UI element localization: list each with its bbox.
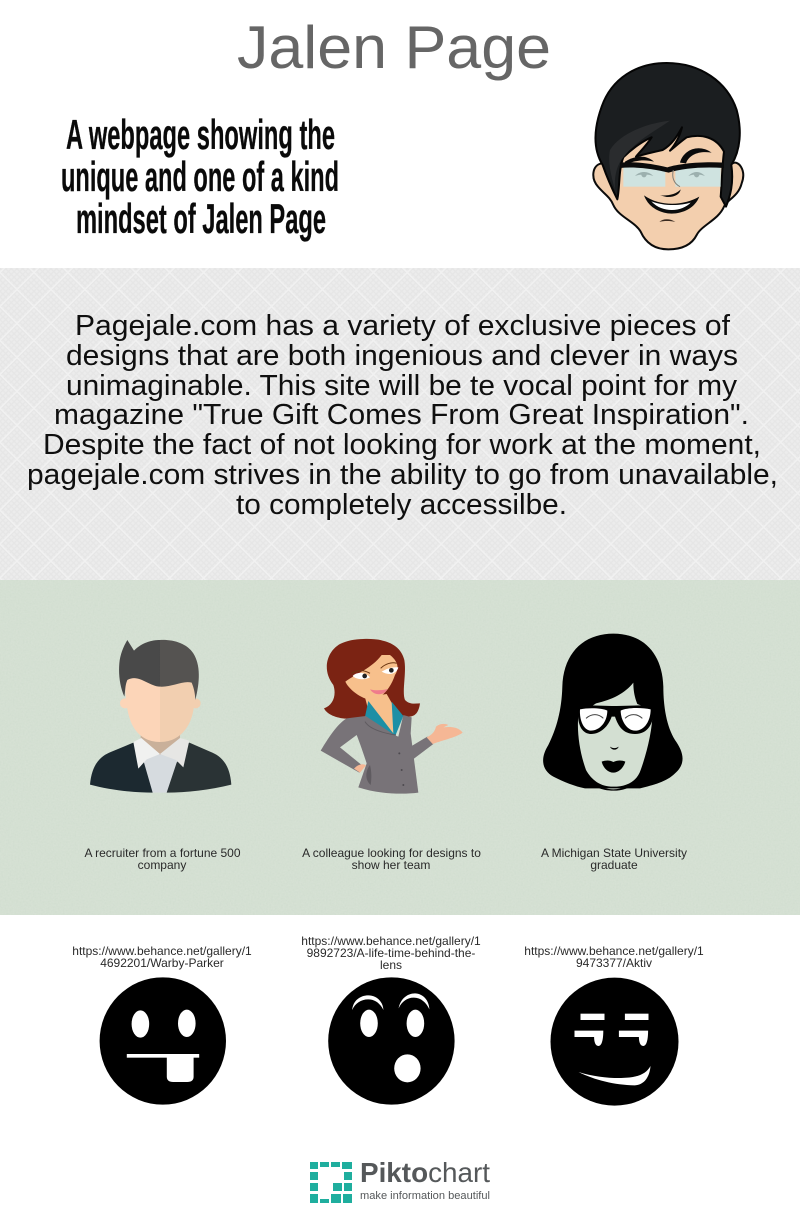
icon: smirking face	[550, 978, 678, 1106]
caption: recruiter	[84, 846, 241, 872]
icon: surprised face	[328, 977, 455, 1105]
subtitle: mindset of Jalen Page	[76, 195, 326, 242]
link: Aktiv	[524, 944, 704, 970]
icon: colleague	[321, 639, 463, 794]
caption: recruiter: A recruiter from a fortune 500	[84, 846, 241, 860]
description text: to completely accessilbe.	[236, 489, 567, 521]
description text: Pagejale.com has a variety of exclusive pieces of	[75, 310, 731, 342]
subtitle: A webpage showing the	[66, 111, 335, 158]
eyebrows	[625, 148, 712, 165]
logo mark	[310, 1162, 352, 1203]
icon: university graduate	[543, 634, 683, 791]
icon: recruiter	[90, 640, 231, 793]
nose	[660, 189, 681, 197]
title: Jalen Page	[237, 14, 551, 81]
wordmark: Piktochart	[360, 1157, 490, 1188]
icon: tongue-out face	[100, 977, 226, 1105]
chin	[659, 219, 675, 222]
link: A life time behind the lens: 9892723/A-life-time-behind-the-	[307, 946, 475, 960]
caption: colleague: show her team	[352, 858, 430, 872]
description text: unimaginable. This site will be te vocal point for my	[66, 370, 738, 402]
description text: designs that are both ingenious and clever in ways	[66, 340, 738, 372]
glasses	[620, 162, 724, 187]
link: A life time behind the lens: https://www.behance.net/gallery/1	[301, 934, 481, 948]
link: Warby-Parker: 4692201/Warby-Parker	[100, 956, 224, 970]
logo: Piktochart	[310, 1157, 490, 1203]
mouth	[644, 195, 699, 214]
panel: audience	[0, 580, 800, 915]
link: Warby-Parker: https://www.behance.net/gallery/1	[72, 944, 252, 958]
description text: magazine "True Gift Comes From Great Inspiration".	[54, 399, 749, 431]
link: Aktiv: https://www.behance.net/gallery/1	[524, 944, 704, 958]
caption: colleague: A colleague looking for designs to	[302, 846, 481, 860]
caption: recruiter: company	[138, 858, 186, 872]
subtitle: unique and one of a kind	[61, 153, 339, 200]
panel: description	[0, 268, 800, 580]
description text	[27, 310, 778, 521]
link: Aktiv: 9473377/Aktiv	[576, 956, 652, 970]
link: A life time behind the lens	[301, 934, 481, 972]
description text: pagejale.com strives in the ability to go from unavailable,	[27, 459, 778, 491]
caption: graduate: A Michigan State University	[541, 846, 687, 860]
subtitle	[61, 111, 339, 242]
description text: Despite the fact of not looking for work at the moment,	[43, 429, 761, 461]
caption: colleague	[302, 846, 481, 872]
caption: graduate	[541, 846, 687, 872]
link: A life time behind the lens: lens	[380, 958, 402, 972]
icon: cartoon portrait of Jalen	[593, 63, 743, 249]
tagline: make information beautiful	[360, 1190, 490, 1202]
link: Warby-Parker	[72, 944, 252, 970]
caption: graduate: graduate	[590, 858, 638, 872]
